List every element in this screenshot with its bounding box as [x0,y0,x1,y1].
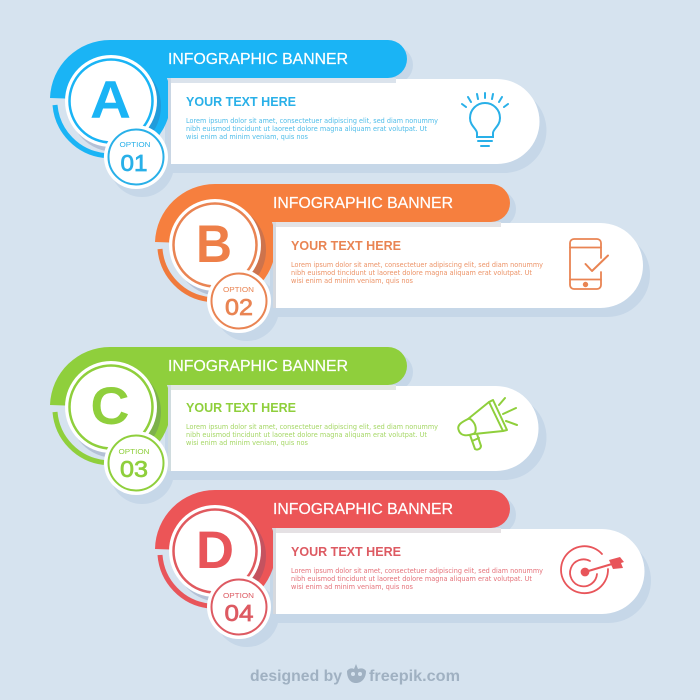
text block: lorem D: nibh euismod tincidunt ut laoreet dolore magna aliquam erat volutpat. Ut [291,575,532,583]
text block: lorem C: wisi enim ad minim veniam, quis nos [186,439,309,447]
badge: letter D: D [196,521,234,580]
badge: option 02 [207,269,271,333]
card: text panel B [276,223,643,308]
footer: freepik credit: freepik.com [369,668,460,685]
badge: option 04: OPTION [223,591,254,600]
panel: banner C [50,347,546,504]
badge: letter B [169,199,261,291]
text block: lorem C: Lorem ipsum dolor sit amet, consectetuer adipiscing elit, sed diam nonummy [186,423,438,431]
heading: banner D title: INFOGRAPHIC BANNER [273,501,453,518]
badge: letter A: A [90,71,131,130]
badge: letter C [65,361,157,453]
badge: option 01: 01 [120,150,148,176]
badge: option 04: 04 [224,600,254,626]
heading: banner B title: INFOGRAPHIC BANNER [273,195,453,212]
text block: lorem B [291,261,543,285]
text block: lorem B: wisi enim ad minim veniam, quis nos [291,277,414,285]
badge: option 03 [104,431,168,495]
badge: option 03: 03 [120,456,148,482]
text block: lorem D: Lorem ipsum dolor sit amet, consectetuer adipiscing elit, sed diam nonummy [291,567,543,575]
badge: option 02: 02 [225,294,253,320]
badge: option 01: OPTION [120,140,150,149]
text block: lorem A [186,117,438,141]
heading: banner A title: INFOGRAPHIC BANNER [168,51,348,68]
badge: option 03: OPTION [118,447,150,456]
badge: letter D [169,505,261,597]
text block: lorem B: Lorem ipsum dolor sit amet, consectetuer adipiscing elit, sed diam nonummy [291,261,543,269]
text block: lorem C: nibh euismod tincidunt ut laoreet dolore magna aliquam erat volutpat. Ut [186,431,427,439]
footer: freepik credit: designed by [250,668,342,685]
text block: lorem B: nibh euismod tincidunt ut laoreet dolore magna aliquam erat volutpat. Ut [291,269,532,277]
panel: banner A [50,40,546,197]
footer: freepik credit [250,664,460,685]
text block: lorem A: wisi enim ad minim veniam, quis nos [186,133,309,141]
text block: lorem D: wisi enim ad minim veniam, quis nos [291,583,414,591]
icon: light bulb [462,93,508,146]
panel: banner B [155,184,650,341]
panel: banner D [155,490,651,647]
heading: your text A: YOUR TEXT HERE [186,95,296,109]
heading: your text D: YOUR TEXT HERE [291,545,401,559]
badge: letter B: B [196,215,232,274]
heading: your text B: YOUR TEXT HERE [291,239,401,253]
icon: target with arrow [561,546,624,593]
icon: smartphone with check [570,239,608,289]
heading: banner C title: INFOGRAPHIC BANNER [168,358,348,375]
card: text panel A [171,79,540,164]
badge: letter C: C [90,377,130,436]
text block: lorem A: Lorem ipsum dolor sit amet, consectetuer adipiscing elit, sed diam nonummy [186,117,438,125]
badge: option 01 [104,125,168,189]
text block: lorem D [291,567,543,591]
text block: lorem A: nibh euismod tincidunt ut laoreet dolore magna aliquam erat volutpat. Ut [186,125,427,133]
card: text panel D [276,529,644,614]
heading: your text C: YOUR TEXT HERE [186,401,296,415]
badge: option 04 [207,575,271,639]
badge: letter A [65,55,157,147]
icon: megaphone [458,398,517,450]
text block: lorem C [186,423,438,447]
badge: option 02: OPTION [223,285,254,294]
card: text panel C [171,386,538,471]
